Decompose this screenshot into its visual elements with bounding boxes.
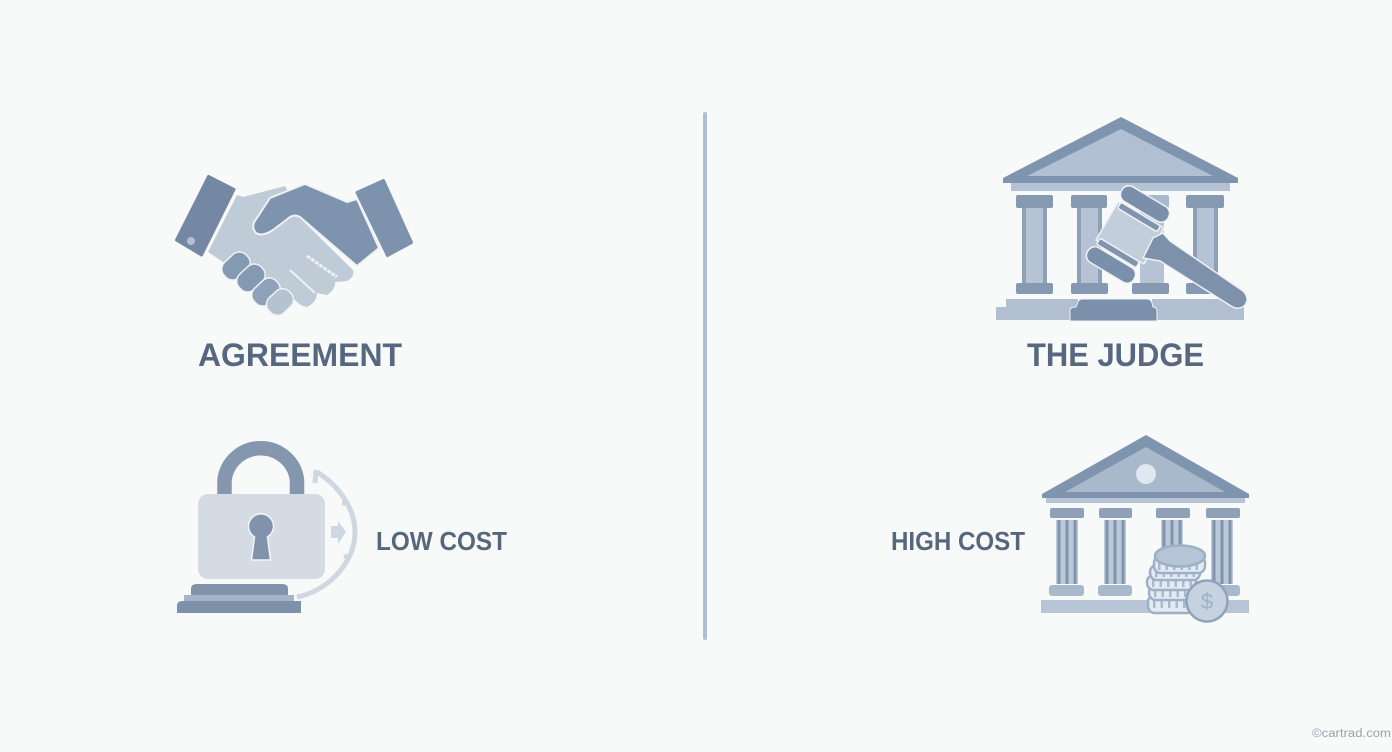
heading: agreement: AGREEMENT xyxy=(198,337,402,373)
gavel xyxy=(1083,183,1247,308)
steps xyxy=(996,299,1244,321)
watermark: ©cartrad.com xyxy=(1312,728,1391,740)
center divider xyxy=(703,112,707,640)
medallion xyxy=(1136,464,1156,484)
lock shackle xyxy=(224,448,297,496)
panel: agreement xyxy=(176,176,412,373)
fingers xyxy=(218,248,297,319)
columns xyxy=(1049,508,1240,596)
icon: padlock xyxy=(177,448,355,613)
circular arrow xyxy=(297,470,355,597)
cuff button xyxy=(187,237,195,245)
pediment xyxy=(1042,435,1249,498)
pediment xyxy=(1003,117,1238,183)
keyhole xyxy=(248,514,274,560)
floor xyxy=(1041,600,1249,613)
lock base xyxy=(177,584,301,613)
icon: bank with coins xyxy=(1041,435,1249,622)
lock body xyxy=(198,494,325,579)
heading: the judge: THE JUDGE xyxy=(1027,337,1204,373)
panel: low cost xyxy=(177,448,507,613)
left cuff xyxy=(176,176,234,255)
finger creases xyxy=(290,256,337,293)
icon: courthouse with gavel xyxy=(996,117,1247,321)
label: high cost: HIGH COST xyxy=(891,526,1025,556)
right cuff xyxy=(357,180,412,256)
light hand xyxy=(208,186,353,307)
columns xyxy=(1016,195,1224,294)
dollar coin xyxy=(1186,580,1228,622)
coin stack xyxy=(1147,546,1205,613)
arrowhead xyxy=(331,521,346,544)
dollar coin: $ xyxy=(1201,589,1213,614)
dark hand xyxy=(253,184,379,266)
panel: high cost xyxy=(891,435,1249,622)
label: low cost: LOW COST xyxy=(376,526,507,556)
panel: the judge xyxy=(996,117,1247,373)
icon: handshake xyxy=(176,176,412,319)
